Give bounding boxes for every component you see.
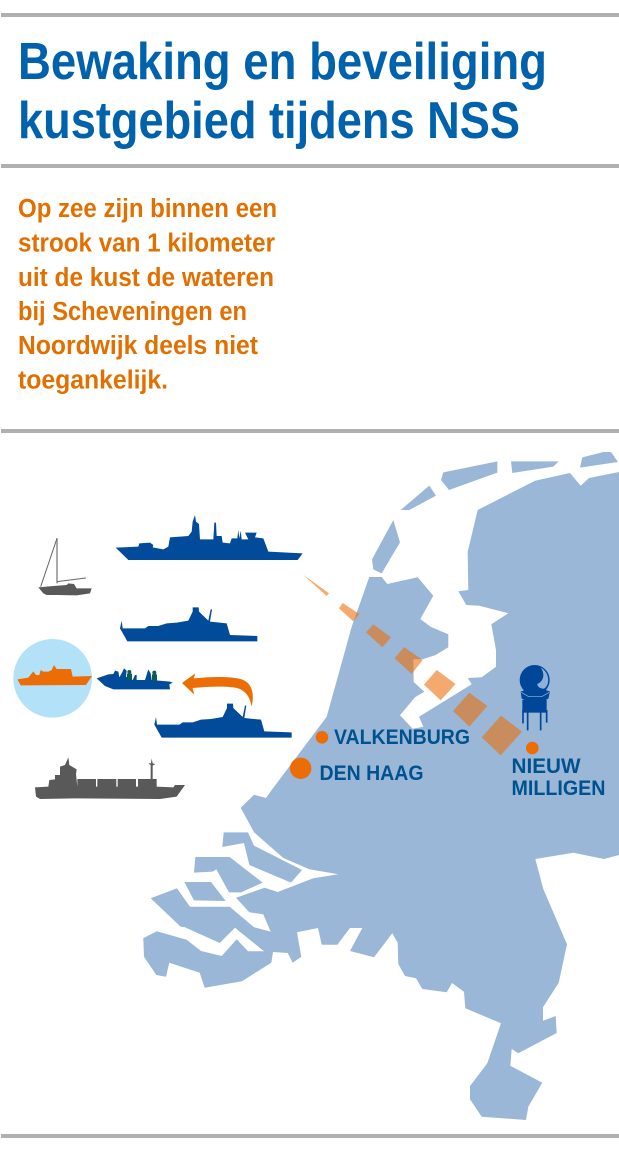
title: Bewaking en beveiliging (18, 33, 547, 91)
intro text: toegankelijk. (18, 366, 168, 394)
intro text: Noordwijk deels niet (18, 332, 258, 360)
intro text: uit de kust de wateren (18, 264, 274, 292)
ship: patrol vessel middle (120, 607, 257, 641)
flight route: dashed orange diamonds (303, 574, 522, 755)
location dots (290, 731, 539, 779)
ships (13, 515, 303, 799)
ship: sailboat (38, 538, 92, 595)
intro text: Op zee zijn binnen een (18, 195, 277, 223)
ship: patrol vessel lower (154, 704, 292, 738)
location labels: NIEUW (512, 754, 581, 778)
wadden islands (372, 452, 618, 573)
intro text: bij Scheveningen en (18, 298, 247, 326)
intro text (18, 195, 277, 394)
ship: frigate top (116, 515, 303, 560)
zeeland islands (184, 832, 302, 901)
ship: inflatable boat with crew (97, 668, 173, 689)
location labels: DEN HAAG (320, 761, 424, 785)
title (18, 33, 547, 150)
location labels: MILLIGEN (512, 776, 606, 800)
arrow (182, 673, 253, 707)
intro text: strook van 1 kilometer (18, 230, 275, 258)
ship: cargo vessel (35, 757, 185, 799)
icon: radar station (520, 665, 550, 730)
title: kustgebied tijdens NSS (18, 92, 520, 150)
location labels: VALKENBURG (334, 725, 470, 749)
location labels (320, 725, 606, 800)
highlight circle with orange boat (13, 639, 92, 718)
map of the Netherlands (143, 452, 619, 1120)
mainland (143, 472, 619, 1120)
